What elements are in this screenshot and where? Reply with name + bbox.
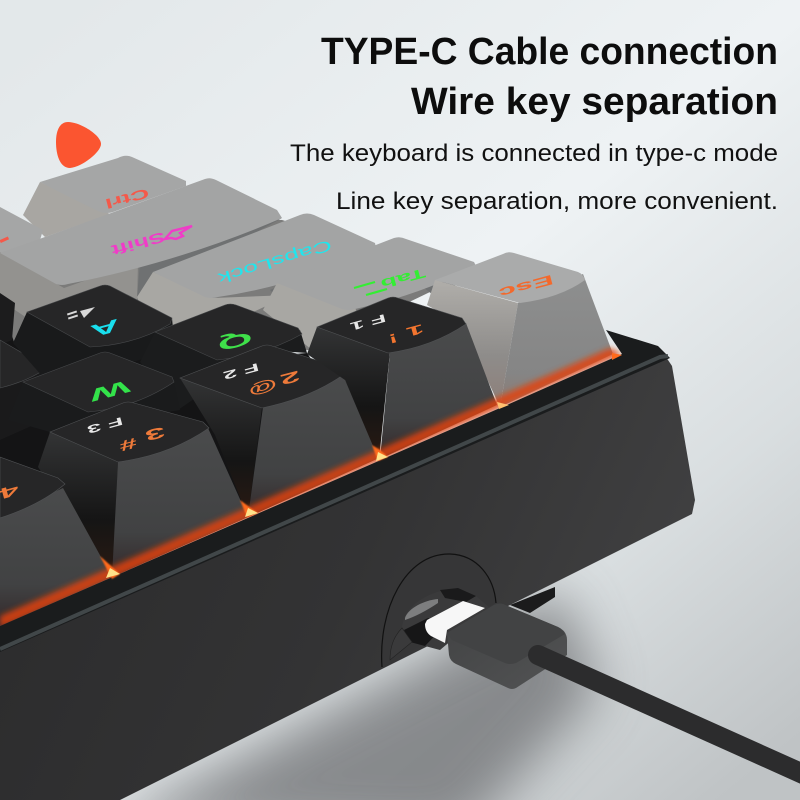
keycap: far-left upper <box>0 293 15 345</box>
black keycap rows <box>0 285 497 626</box>
legend: W: W <box>87 376 132 406</box>
floor shadow <box>100 590 600 800</box>
keycap: left partial <box>0 207 43 262</box>
title: Wire key separation <box>411 81 778 123</box>
keycap: Shift <box>0 178 282 340</box>
icon: tab arrows <box>354 282 387 295</box>
legend: 1: 1 <box>404 321 426 339</box>
keycap: W <box>8 352 180 432</box>
grey keycap row <box>0 156 613 407</box>
legend: 2: 2 <box>278 367 302 389</box>
keycap: CapsLock <box>137 214 376 350</box>
title: TYPE-C Cable connection <box>321 31 778 73</box>
keyboard body side <box>0 354 695 800</box>
description text <box>290 140 778 215</box>
legend: Shift: Shift <box>109 228 167 258</box>
rear foot <box>510 587 555 613</box>
icon: shift arrow <box>165 226 192 239</box>
USB connector <box>425 601 800 778</box>
legend: F1: F 1 <box>349 311 387 333</box>
black key underlay <box>0 300 379 626</box>
keycap: 3 <box>38 402 248 578</box>
icon: media skip <box>67 307 95 319</box>
legend: 3: 3 <box>143 423 167 445</box>
legend: Tab: Tab <box>379 265 427 291</box>
keycap: 2 <box>180 345 379 517</box>
orange backlight glow <box>0 348 622 628</box>
USB cable <box>538 655 800 778</box>
description text: The keyboard is connected in type-c mode <box>290 140 778 167</box>
keycap: 1 <box>307 297 497 460</box>
connector housing <box>447 604 567 689</box>
title <box>321 31 778 123</box>
USB-C port cutout <box>382 554 496 667</box>
legend: exclamation: ! <box>387 330 399 346</box>
keycap: Ctrl <box>23 156 186 237</box>
legend: left partial mark <box>0 237 9 243</box>
legend: F2: F 2 <box>222 360 260 382</box>
legend: Q: Q <box>215 327 255 355</box>
legend: Esc: Esc <box>497 271 555 301</box>
legend: hash: # <box>117 434 139 454</box>
keycap: 4 <box>0 457 112 626</box>
description text: Line key separation, more convenient. <box>336 188 778 215</box>
legend: CapsLock: CapsLock <box>215 236 334 288</box>
keycap: Q <box>140 304 307 410</box>
backlight sparks at key corners <box>100 402 509 579</box>
keycap underlay <box>0 215 476 360</box>
legend: Ctrl: Ctrl <box>103 185 151 211</box>
legend: F3: F 3 <box>86 414 124 436</box>
legend: at sign: @ <box>247 377 279 399</box>
legend: A: A <box>88 315 122 341</box>
keycap: Esc <box>427 252 613 407</box>
keycap: Tab <box>263 237 476 350</box>
keycap: A <box>13 285 175 385</box>
top plate and rim <box>0 330 670 652</box>
keycap: S row far-left <box>0 340 45 440</box>
icon: orange pick <box>56 122 101 168</box>
white plug tip <box>425 601 485 643</box>
